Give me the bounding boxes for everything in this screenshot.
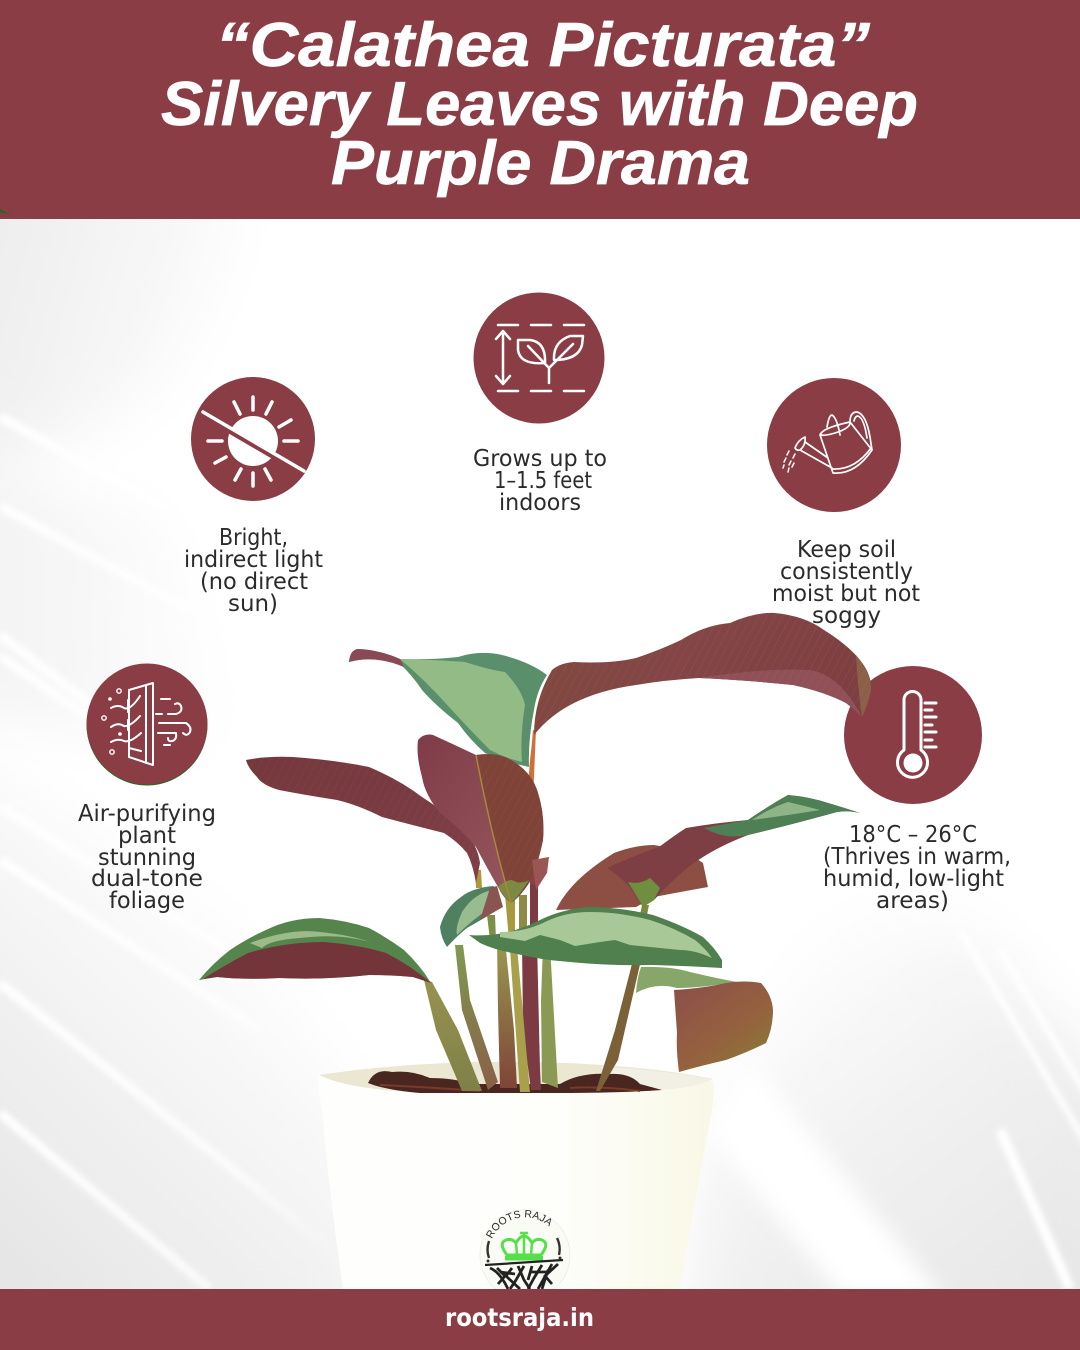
leaf: centre large green xyxy=(469,907,722,968)
text: height: Grows up to xyxy=(473,446,607,472)
footer band xyxy=(0,1289,1080,1350)
text: temperature: 18°C – 26°C xyxy=(849,822,977,848)
panel: water xyxy=(767,378,920,629)
stems xyxy=(424,730,649,1092)
text: light: Bright, xyxy=(219,525,288,551)
icon: thermometer xyxy=(844,666,982,804)
text: water: Keep soil xyxy=(797,537,896,563)
text: air purifying xyxy=(78,801,216,914)
title: Silvery Leaves with Deep xyxy=(161,70,918,139)
header band xyxy=(0,0,1080,219)
title: Purple Drama xyxy=(331,129,750,198)
text: air purifying: plant xyxy=(118,823,176,849)
icon: watering can xyxy=(767,378,901,512)
logo badge: ROOTS RAJA xyxy=(486,1210,552,1238)
text: water: consistently xyxy=(780,559,913,585)
text: light: indirect light xyxy=(184,547,323,573)
text: air purifying: Air-purifying xyxy=(78,801,216,827)
text: air purifying: foliage xyxy=(109,888,185,914)
text: temperature xyxy=(823,822,1011,914)
panel: air purifying xyxy=(78,664,216,914)
text: air purifying: stunning xyxy=(98,845,196,871)
leaf: long left xyxy=(246,757,480,883)
text: height: indoors xyxy=(499,490,581,516)
text: light: sun) xyxy=(228,591,278,617)
text: light: (no direct xyxy=(200,569,308,595)
text: water xyxy=(772,537,920,629)
text: water: soggy xyxy=(812,603,881,629)
leaf: brown rear right xyxy=(556,845,708,910)
icon: air filter xyxy=(86,664,208,786)
text: light xyxy=(184,525,323,617)
logo badge xyxy=(480,1210,570,1289)
text: water: moist but not xyxy=(772,581,920,607)
title xyxy=(161,11,918,198)
title: “Calathea Picturata” xyxy=(216,11,870,80)
leaf: lower right xyxy=(636,967,773,1072)
pot xyxy=(318,1062,713,1289)
text: air purifying: dual-tone xyxy=(91,866,203,892)
leaf: upper green xyxy=(349,649,547,767)
icon: plant height xyxy=(474,292,604,424)
icon: no direct sun xyxy=(191,377,315,501)
leaf: centre red xyxy=(418,735,543,903)
leaf: small green and red stub xyxy=(440,857,549,947)
leaf: large red top xyxy=(534,613,871,735)
text: height: 1–1.5 feet xyxy=(494,468,592,494)
text: temperature: humid, low-light xyxy=(823,866,1004,892)
leaf: twisted right xyxy=(607,795,860,907)
leaf: lower left xyxy=(199,918,431,983)
panel: height xyxy=(473,292,607,516)
icon: green crown xyxy=(502,1233,546,1260)
text: temperature: (Thrives in warm, xyxy=(823,844,1011,870)
text: temperature: areas) xyxy=(876,888,949,914)
pot with plant xyxy=(199,612,871,1289)
panel: light xyxy=(184,377,323,617)
footer url: rootsraja.in xyxy=(445,1303,594,1332)
text: height xyxy=(473,446,607,516)
